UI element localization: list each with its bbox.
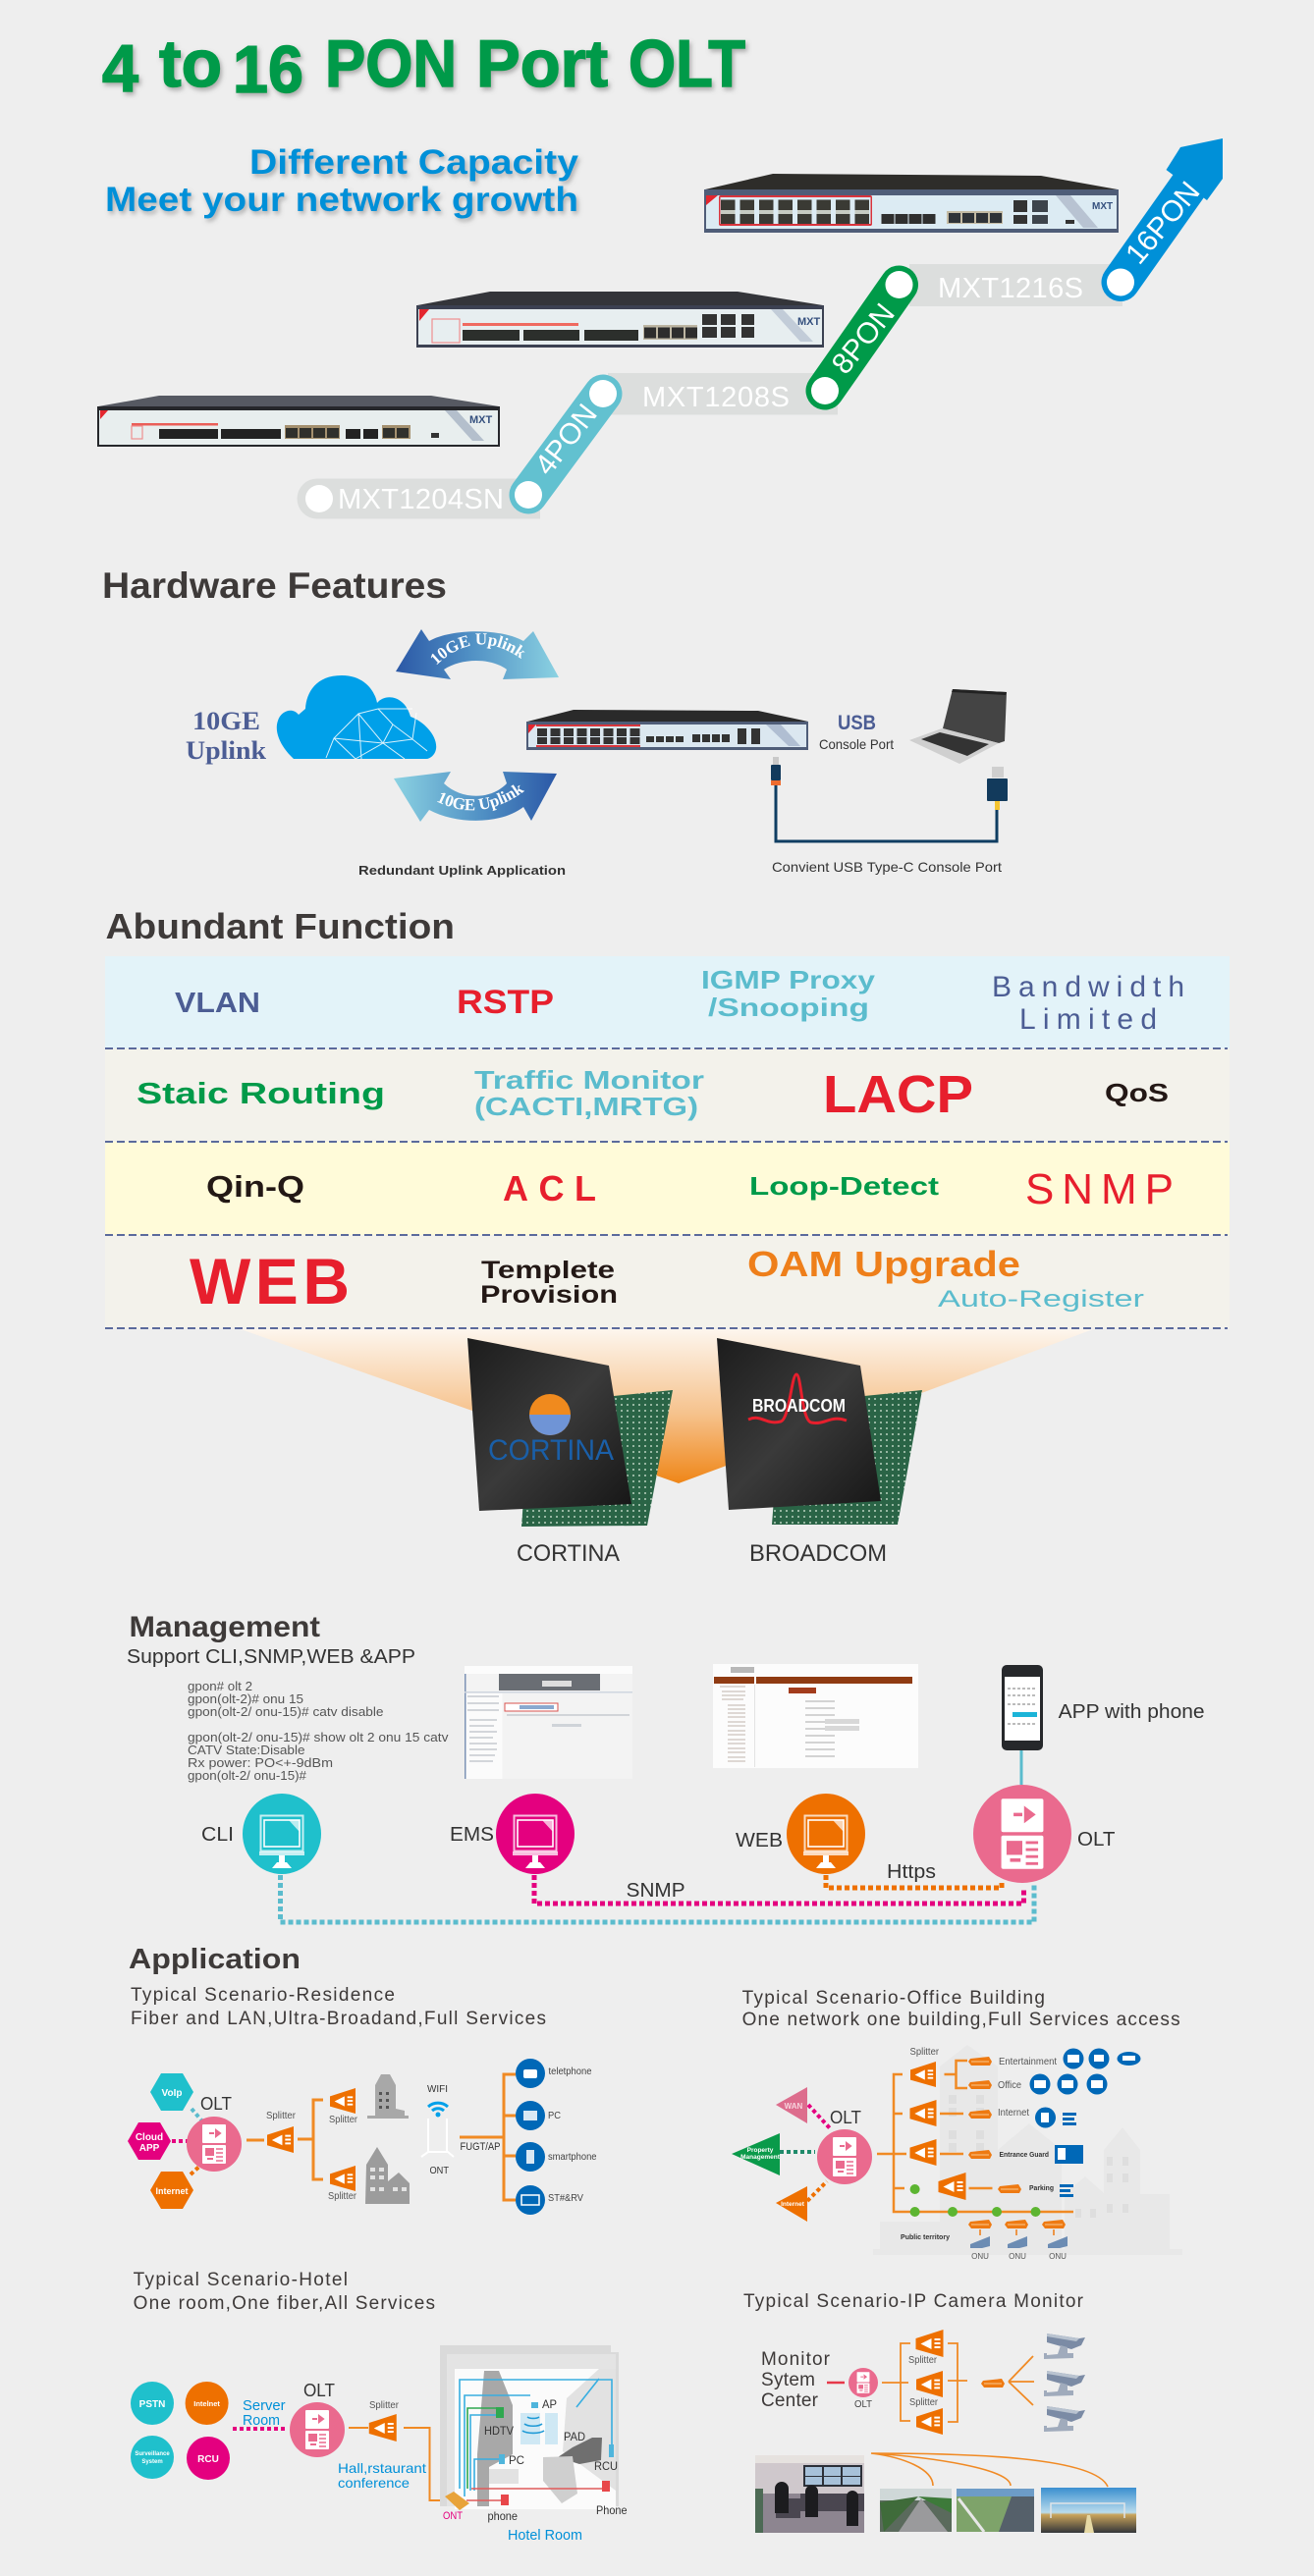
label: 10GE Uplink	[186, 707, 267, 765]
device: MXT1216S	[704, 174, 1119, 233]
label: Https: Https	[887, 1861, 936, 1883]
panel: function table: /Snooping	[708, 993, 869, 1022]
caption: redundant uplink: Redundant Uplink Application	[358, 863, 566, 878]
panel: function table: LACP	[823, 1065, 973, 1124]
label: USB Console Port	[819, 712, 894, 752]
node: EMS: EMS	[450, 1824, 494, 1846]
panel: function table: Templete	[481, 1257, 615, 1284]
staircase: MXT1204SN step	[297, 479, 540, 518]
node: WEB: WEB	[736, 1830, 783, 1852]
diagram: office building: Office	[998, 2080, 1021, 2091]
text: office scenario: Typical Scenario-Office Building	[742, 1988, 1045, 2009]
diagram: residence: VoIp	[162, 2088, 182, 2099]
node: EMS	[450, 1794, 575, 1874]
diagram: residence: smartphone	[548, 2152, 597, 2163]
panel: function table: Provision	[480, 1281, 618, 1309]
title: Port	[476, 27, 608, 101]
title: PON	[325, 27, 457, 101]
diagram: residence: OLT	[200, 2094, 232, 2114]
heading: Management: Management	[130, 1611, 320, 1643]
link: Https dotted	[826, 1875, 1002, 1888]
arrow: bottom uplink	[394, 772, 557, 822]
diagram: office building: Internet	[998, 2108, 1029, 2119]
diagram: hotel: Room	[243, 2412, 280, 2429]
diagram: office building: Public territory	[901, 2232, 951, 2241]
arrow: top uplink	[396, 629, 559, 679]
label: 10GE Uplink: Uplink	[186, 736, 267, 765]
4PON pill	[515, 380, 617, 509]
staircase: MXT1208S step: MXT1208S	[642, 382, 790, 413]
panel: function table	[105, 956, 1230, 1328]
diagram: office building: Entertainment	[999, 2057, 1057, 2067]
diagram: hotel: ONT	[443, 2510, 463, 2522]
heading: Hardware Features: Hardware Features	[102, 565, 447, 606]
diagram: residence: Internet	[155, 2186, 189, 2196]
arrow: bottom uplink: 10GE Uplink	[437, 784, 524, 811]
icon: laptop	[909, 689, 1007, 764]
panel: function table: Qin-Q	[206, 1169, 304, 1204]
text: CLI commands: Rx power: PO<+-9dBm	[188, 1755, 333, 1770]
diagram: residence: teletphone	[548, 2066, 592, 2077]
node: OLT: OLT	[1077, 1829, 1116, 1851]
diagram: hotel	[131, 2345, 628, 2544]
diagram: office building	[732, 2045, 1182, 2261]
panel: function table: Bandwidth	[992, 971, 1184, 1003]
photo: toll gantry	[1041, 2488, 1136, 2533]
diagram: hotel: Splitter	[369, 2400, 400, 2411]
panel: function table: VLAN	[175, 988, 260, 1019]
diagram: office building: ONU	[1009, 2252, 1026, 2261]
4PON pill: 4PON	[529, 399, 604, 481]
diagram: residence: APP	[139, 2143, 160, 2154]
staircase: MXT1204SN step: MXT1204SN	[338, 484, 504, 515]
node: CLI: CLI	[201, 1824, 234, 1846]
text: CLI commands: CATV State:Disable	[188, 1743, 304, 1757]
funnel gradient	[241, 1329, 1093, 1483]
panel: function table: Loop-Detect	[749, 1171, 939, 1201]
diagram: IP camera: Monitor	[761, 2349, 831, 2370]
diagram: hotel: PAD	[564, 2430, 585, 2443]
text: CLI commands: gpon# olt 2	[188, 1679, 252, 1693]
hotel room illustration	[440, 2345, 619, 2510]
8PON pill: 8PON	[826, 297, 902, 380]
panel: function table: IGMP Proxy	[701, 965, 876, 994]
panel: function table: WEB	[190, 1245, 350, 1317]
panel: function table: Traffic Monitor	[474, 1065, 704, 1095]
diagram: hotel: PSTN	[139, 2399, 165, 2410]
text: management support: Support CLI,SNMP,WEB &APP	[127, 1646, 415, 1668]
diagram: residence: PC	[548, 2111, 561, 2121]
label: USB Console Port: USB	[838, 712, 876, 734]
diagram: residence: WIFI	[427, 2083, 448, 2095]
device: MXT1208S	[416, 292, 824, 348]
diagram: office building: Parking	[1029, 2183, 1054, 2192]
icon: Cortina chip: CORTINA	[488, 1434, 614, 1467]
screenshot: WEB	[713, 1664, 918, 1768]
diagram: residence: Splitter	[329, 2114, 357, 2125]
diagram: hotel: System	[141, 2459, 163, 2465]
title	[102, 27, 745, 107]
diagram: hotel: AP	[542, 2397, 557, 2411]
panel: function table: Staic Routing	[137, 1076, 385, 1110]
icon: Cortina chip	[467, 1338, 673, 1527]
text: office scenario	[742, 1988, 1180, 2030]
link: CLI dotted	[281, 1875, 1034, 1922]
diagram: office building: Property	[747, 2147, 774, 2154]
panel: function table: Auto-Register	[938, 1286, 1144, 1313]
diagram: residence: ST#&RV	[548, 2193, 583, 2204]
icon: cloud	[277, 675, 436, 759]
diagram: IP camera: Center	[761, 2390, 819, 2411]
diagram: hotel: HDTV	[484, 2424, 514, 2438]
device: MXT1204SN	[97, 396, 500, 447]
diagram: office building: OLT	[830, 2108, 861, 2127]
icon: Broadcom chip: BROADCOM	[752, 1396, 846, 1416]
diagram: hotel: Intelnet	[193, 2399, 220, 2408]
diagram: residence: Splitter	[266, 2110, 296, 2121]
text: residence scenario: Typical Scenario-Residence	[131, 1985, 395, 2006]
diagram: hotel: conference	[338, 2475, 410, 2491]
diagram: residence: FUGT/AP	[460, 2141, 501, 2153]
diagram: hotel: Surveillance	[135, 2451, 170, 2457]
diagram: office building: Splitter	[909, 2046, 939, 2058]
diagram: residence	[128, 2059, 597, 2215]
diagram: IP camera: Splitter	[908, 2355, 938, 2366]
screenshot: EMS	[465, 1666, 632, 1779]
panel: function table: Limited	[1019, 1003, 1157, 1036]
diagram: hotel: OLT	[303, 2381, 335, 2400]
icon: Broadcom chip	[717, 1338, 922, 1525]
diagram: office building: Management	[740, 2154, 781, 2161]
node: CLI	[201, 1794, 321, 1874]
panel: function table: ACL	[503, 1168, 596, 1208]
panel: function table: QoS	[1105, 1078, 1169, 1107]
diagram: IP camera: Sytem	[761, 2370, 815, 2390]
diagram: hotel: phone	[487, 2509, 518, 2523]
text: CLI commands: gpon(olt-2/ onu-15)#	[188, 1768, 307, 1783]
subtitle: Different Capacity	[249, 143, 579, 182]
diagram: IP camera: Splitter	[909, 2397, 939, 2408]
diagram: office building: ONU	[971, 2252, 989, 2261]
diagram: office building: Entrance Guard	[1000, 2150, 1049, 2159]
diagram: residence: ONT	[430, 2165, 450, 2176]
panel: function table: SNMP	[1025, 1165, 1174, 1213]
panel: function table: RSTP	[457, 984, 554, 1021]
text: CLI commands	[188, 1679, 449, 1783]
heading: Abundant Function: Abundant Function	[106, 906, 455, 946]
arrow: top uplink: 10GE Uplink	[430, 633, 524, 665]
caption: BROADCOM: BROADCOM	[749, 1540, 887, 1567]
diagram: hotel: Hall,rstaurant	[338, 2460, 426, 2476]
staircase: MXT1208S step	[608, 373, 838, 414]
staircase: MXT1216S step: MXT1216S	[938, 273, 1083, 304]
device: OLT in hardware diagram	[526, 710, 808, 750]
text: hotel scenario: One room,One fiber,All Services	[134, 2293, 435, 2314]
diagram: IP camera: OLT	[854, 2399, 872, 2410]
panel: function table: OAM Upgrade	[747, 1244, 1020, 1284]
text: office scenario: One network one building,Full Services access	[742, 2010, 1180, 2030]
photo: highway	[957, 2489, 1034, 2532]
device: MXT1204SN: MXT	[469, 414, 493, 426]
icon: USB cable	[771, 757, 1008, 841]
diagram: office building: ONU	[1049, 2252, 1067, 2261]
subtitle	[105, 143, 579, 219]
caption: CORTINA: CORTINA	[517, 1540, 620, 1567]
diagram: office building: Internet	[781, 2201, 805, 2208]
16PON arrow: 16PON	[1120, 176, 1207, 270]
8PON pill	[811, 271, 913, 404]
link: phone to OLT	[1019, 1750, 1023, 1785]
title: to	[159, 27, 222, 101]
text: hotel scenario: Typical Scenario-Hotel	[134, 2270, 348, 2290]
photo: road traffic	[880, 2489, 952, 2532]
text: CLI commands: gpon(olt-2)# onu 15	[188, 1691, 303, 1706]
device: MXT1216S: MXT	[1092, 201, 1113, 212]
16PON arrow	[1107, 138, 1223, 296]
diagram: residence: Cloud	[136, 2132, 163, 2143]
text: IP camera scenario: Typical Scenario-IP Camera Monitor	[743, 2291, 1084, 2312]
node: OLT	[973, 1785, 1116, 1883]
diagram: hotel: Server	[243, 2397, 286, 2414]
device: MXT1208S: MXT	[797, 316, 821, 328]
label: USB Console Port: Console Port	[819, 736, 894, 752]
text: CLI commands: gpon(olt-2/ onu-15)# catv disable	[188, 1704, 383, 1719]
diagram: IP camera	[755, 2330, 1136, 2533]
text: CLI commands: gpon(olt-2/ onu-15)# show olt 2 onu 15 catv	[188, 1730, 449, 1744]
text: residence scenario: Fiber and LAN,Ultra-Broadand,Full Services	[131, 2009, 546, 2029]
node: WEB	[736, 1794, 865, 1874]
title: 16	[233, 32, 303, 107]
label: APP with phone: APP with phone	[1059, 1701, 1205, 1723]
diagram: hotel: Hotel Room	[508, 2527, 582, 2544]
label: SNMP: SNMP	[627, 1880, 685, 1902]
text: hotel scenario	[134, 2270, 435, 2314]
diagram: hotel: RCU	[594, 2459, 618, 2473]
text: residence scenario	[131, 1985, 546, 2029]
subtitle: Meet your network growth	[105, 181, 578, 219]
staircase: MXT1216S step	[909, 264, 1122, 306]
title: 4	[102, 31, 138, 106]
diagram: hotel: PC	[509, 2453, 524, 2467]
diagram: hotel: Phone	[596, 2503, 628, 2517]
heading: Application: Application	[129, 1944, 301, 1975]
diagram: residence: Splitter	[328, 2190, 356, 2202]
diagram: office building: WAN	[785, 2102, 803, 2111]
link: SNMP dotted	[534, 1875, 1023, 1904]
panel: function table: (CACTI,MRTG)	[474, 1092, 698, 1121]
label: 10GE Uplink: 10GE	[192, 707, 260, 735]
title: OLT	[629, 27, 745, 101]
photo: control room	[755, 2455, 864, 2533]
icon: phone	[1002, 1665, 1043, 1750]
diagram: hotel: RCU	[197, 2454, 219, 2465]
caption: USB console: Convient USB Type-C Console Port	[772, 859, 1002, 875]
